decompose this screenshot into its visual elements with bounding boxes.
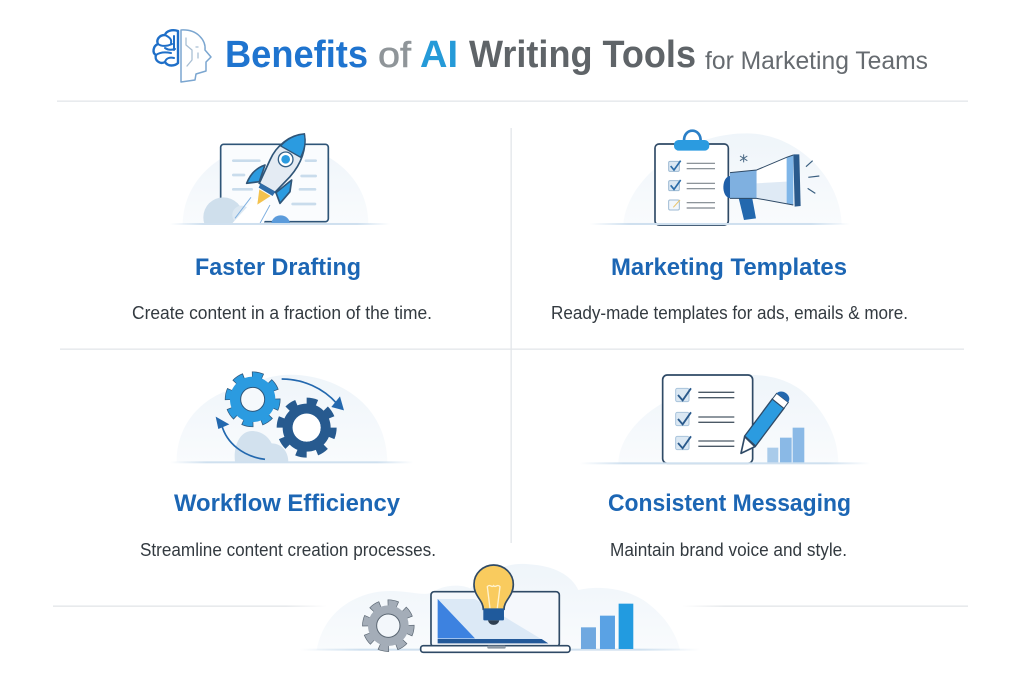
heading: Faster Drafting [195, 254, 361, 281]
header: icon and title [154, 30, 928, 82]
panel: marketing templates [551, 131, 908, 323]
icon: laptop [421, 592, 570, 652]
bar chart [581, 604, 633, 649]
heading: Marketing Templates [611, 254, 847, 281]
description: Maintain brand voice and style. [610, 540, 847, 560]
header: icon and title: AI [420, 34, 458, 76]
illustration: laptop with lightbulb, gear and bar chart [300, 564, 700, 652]
description: Ready-made templates for ads, emails & more. [551, 303, 908, 323]
header: icon and title: Writing Tools [469, 34, 696, 76]
heading: Consistent Messaging [608, 490, 851, 517]
heading: Workflow Efficiency [174, 490, 401, 517]
title: Benefits [225, 34, 368, 76]
description: Streamline content creation processes. [140, 540, 436, 560]
icon: rocket over document [176, 133, 384, 225]
panel: faster drafting [132, 134, 432, 323]
icon: brain and head [154, 30, 211, 82]
panel: consistent messaging [580, 375, 870, 560]
header: icon and title: for Marketing Teams [705, 47, 928, 75]
header: icon and title: of [378, 34, 412, 75]
icon: gear [366, 603, 411, 648]
icon: lightbulb [474, 565, 513, 625]
icon: checklist, pencil and bars [580, 375, 870, 464]
icon: gears and arrows [170, 375, 413, 463]
panel: workflow efficiency [140, 375, 436, 560]
icon: clipboard and megaphone [590, 131, 850, 225]
description: Create content in a fraction of the time. [132, 303, 432, 323]
